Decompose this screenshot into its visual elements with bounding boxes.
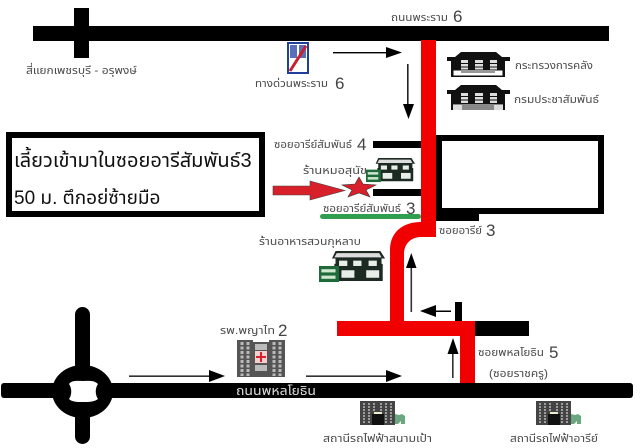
label: Phyathai 2 hospital: รพ.พญาไท [220, 325, 275, 337]
building: Suan Kularb restaurant [319, 251, 385, 282]
label: Phyathai 2 hospital: 2 [278, 321, 287, 340]
label: Rama 6 expressway: ทางด่วนพระราม [255, 77, 328, 90]
icon: red star destination [342, 177, 376, 197]
label: Ministry of Finance: กระทรวงการคลัง [515, 60, 593, 72]
label: Mor Suni shop: ร้านหมอสุนัข [303, 165, 367, 177]
icon: hospital building [237, 340, 285, 377]
red route [337, 40, 475, 383]
label: Rama 6 road [391, 7, 462, 26]
label: Phahon Yothin road: ถนนพหลโยธิน [236, 384, 316, 398]
label: Suan Kularb restaurant: ร้านอาหารสวนกุหลาบ [259, 236, 361, 248]
building: Mor Suni shop [366, 158, 415, 182]
label: Rama 6 road: ถนนพระราม [391, 12, 448, 24]
side road stub [455, 302, 462, 321]
icon: Ari station [536, 401, 581, 425]
label: Soi Phahon Yothin 5: 5 [549, 343, 558, 362]
label: Soi Ari Samphan 3 [323, 199, 415, 218]
side road: Soi Ari Samphan 4 [373, 141, 421, 148]
road: Phahon Yothin with roundabout [1, 307, 633, 444]
arrow: east on Phahon Yothin 1 [129, 370, 225, 382]
arrow: north on Soi Phahon Yothin 5 [448, 338, 458, 378]
arrow: red pointer [273, 181, 345, 200]
label: Rama 6 expressway [255, 74, 344, 93]
label: Soi Ari 3: ซอยอารีย์ [439, 225, 482, 237]
label: Soi Ari Samphan 3: 3 [406, 199, 415, 218]
arrow: west toward Soi Ari [420, 305, 451, 317]
label: Soi Ari Samphan 4: 4 [357, 135, 366, 154]
callout box: directions [9, 135, 262, 214]
arrow: east on Phahon Yothin 2 [306, 370, 402, 382]
road: Rama 6 top road [33, 8, 609, 58]
road highlight: green Soi Ari Samphan 3 [320, 214, 421, 219]
building: Ministry of Finance [447, 52, 510, 77]
label: Sanam Pao BTS station: สถานีรถไฟฟ้าสนามเป้า [323, 432, 432, 445]
building: Public Relations Department [447, 85, 510, 110]
label: Rama 6 road: 6 [453, 7, 462, 26]
label: Rama 6 expressway: 6 [335, 74, 344, 93]
side road: Soi Ari 3 [436, 214, 479, 221]
icon: Sanam Pao station [360, 401, 405, 425]
callout box: directions: 50 ม. ตึกอย่ซ้ายมือ [14, 186, 160, 209]
arrow: south from Rama 6 [403, 64, 414, 119]
icon: expressway end sign [288, 43, 308, 73]
label: Soi Phahon Yothin 5: (ซอยราชครู) [489, 368, 548, 380]
label: Soi Phahon Yothin 5 [478, 343, 558, 380]
label: Soi Ari 3 [439, 221, 495, 240]
label: Ari BTS station: สถานีรถไฟฟ้าอารีย์ [510, 432, 598, 445]
label: Soi Ari Samphan 4: ซอยอารีย์สัมพันธ์ [274, 139, 352, 151]
callout box: directions: เลี้ยวเข้ามาในซอยอารีสัมพันธ์3 [14, 146, 252, 172]
label: Soi Ari Samphan 3: ซอยอารีย์สัมพันธ์ [323, 203, 401, 215]
label: Soi Ari 3: 3 [486, 221, 495, 240]
label: Soi Phahon Yothin 5: ซอยพหลโยธิน [478, 347, 544, 359]
side road: Soi Phahon Yothin 5 east [475, 321, 529, 336]
right blank box [439, 138, 601, 211]
label: Public Relations Department: กรมประชาสัมพันธ์ [514, 94, 599, 106]
side road: Soi Ari Samphan 3 [373, 189, 421, 196]
label: Phetchaburi Aroonpong intersection: สี่แยกเพชรบุรี - อรุพงษ์ [26, 62, 137, 77]
arrow: north on Soi Ari [406, 253, 416, 312]
label: Phyathai 2 hospital [220, 321, 287, 340]
arrow: east along Rama 6 [333, 47, 402, 58]
label: Soi Ari Samphan 4 [274, 135, 366, 154]
